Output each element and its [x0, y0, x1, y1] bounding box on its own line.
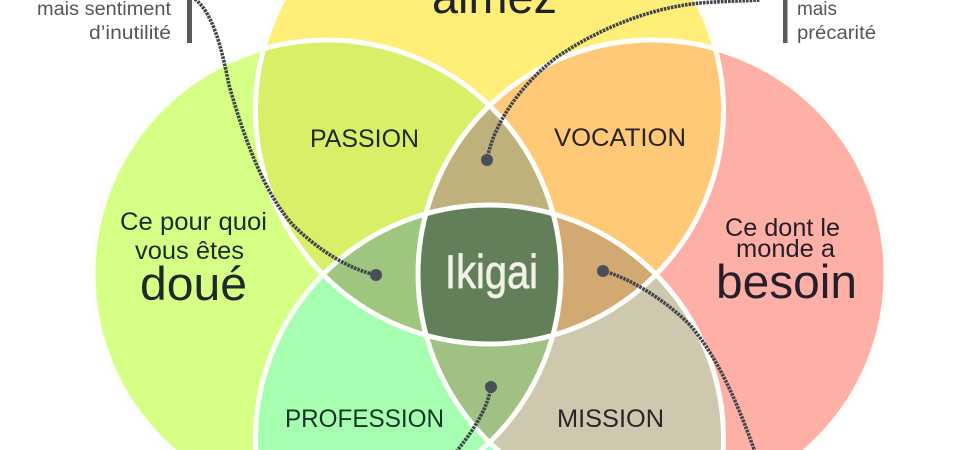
- region: lens right: [556, 218, 652, 332]
- heading: doué group: Ce pour quoi: [120, 208, 267, 236]
- circle: ce que vous aimez: [256, 0, 724, 344]
- dot: bottom lens: [485, 381, 497, 393]
- region: vocation: [493, 42, 721, 271]
- connector: top lens dotted arrow: [487, 0, 760, 160]
- bracket bar left: [187, 0, 192, 43]
- text block: mais précarité: précarité: [797, 23, 876, 44]
- label: ikigai: Ikigai: [445, 245, 538, 298]
- heading: besoin group: [716, 214, 857, 308]
- connector: bottom lens dotted arrow: [456, 387, 491, 450]
- connector: right lens dotted arrow: [603, 271, 755, 450]
- dot: left lens: [370, 269, 382, 281]
- heading: doué group: doué: [140, 257, 247, 310]
- connector: left lens dotted arrow: [192, 0, 377, 275]
- region: ikigai centre: [420, 208, 558, 342]
- heading: besoin group: Ce dont le: [725, 214, 840, 242]
- region: mission: [493, 278, 721, 450]
- heading: besoin group: monde a: [736, 235, 835, 263]
- bracket bar right: [783, 0, 788, 43]
- heading: besoin group: besoin: [716, 255, 857, 308]
- heading: doué group: [120, 208, 267, 310]
- heading: doué group: vous êtes: [135, 237, 244, 265]
- circle: ce dont le monde a besoin: [418, 40, 886, 450]
- label: vocation: VOCATION: [554, 124, 686, 152]
- label: passion: PASSION: [310, 125, 419, 153]
- text block: mais précarité: [797, 0, 876, 44]
- text block: mais sentiment d'inutilité: d’inutilité: [89, 23, 171, 44]
- circle: ce pour quoi vous êtes doué: [93, 40, 561, 450]
- dot: top lens: [481, 154, 493, 166]
- dot: right lens: [597, 265, 609, 277]
- region: lens bottom: [430, 338, 550, 439]
- label: profession: PROFESSION: [285, 405, 444, 433]
- region: passion: [258, 42, 486, 271]
- circle: ce pour quoi vous êtes payé: [256, 205, 724, 450]
- text block: mais sentiment d'inutilité: [37, 0, 172, 44]
- region: profession: [258, 278, 486, 450]
- region: lens top: [430, 109, 550, 210]
- label: mission: MISSION: [557, 405, 664, 433]
- region: lens left: [326, 218, 422, 332]
